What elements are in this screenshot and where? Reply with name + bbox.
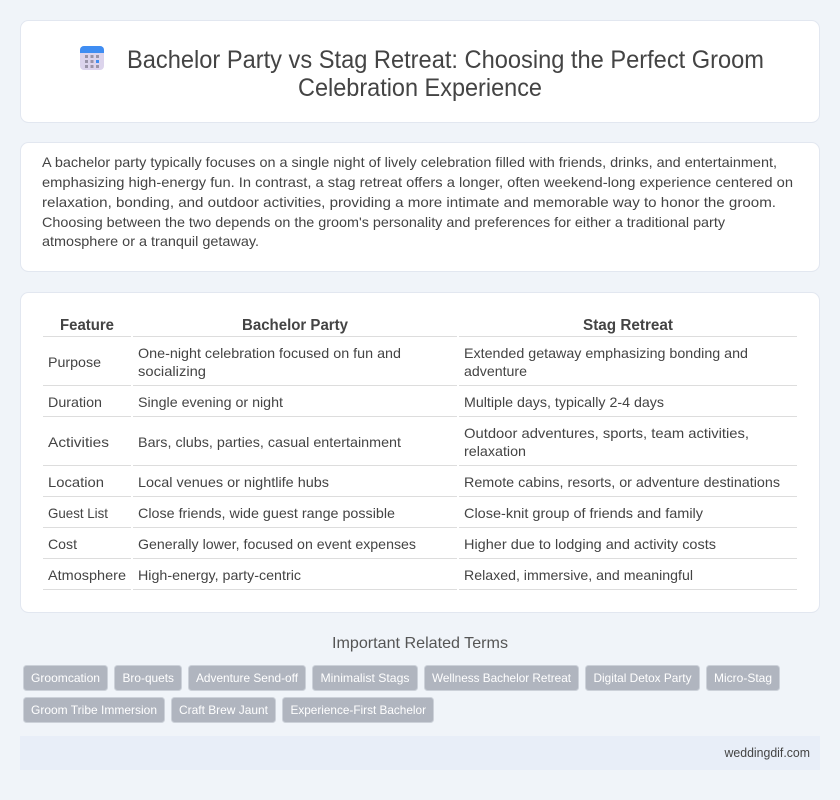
table header: Stag Retreat bbox=[583, 317, 673, 334]
row: purpose: One-night celebration focused on fun and bbox=[138, 345, 401, 361]
title: Bachelor Party vs Stag Retreat: Choosing the Perfect Groom bbox=[127, 46, 764, 74]
row: purpose: socializing bbox=[138, 363, 206, 379]
panel: intro text: emphasizing high-energy fun. In contrast, a stag retreat offers a longer, often weekend-long experience centered on bbox=[42, 174, 793, 190]
row: location: Remote cabins, resorts, or adventure destinations bbox=[464, 474, 780, 490]
row: activities: Activities bbox=[48, 434, 109, 450]
panel: related term tags: Adventure Send-off bbox=[196, 671, 299, 685]
row: atmosphere: Atmosphere bbox=[48, 567, 126, 583]
row: activities: relaxation bbox=[464, 443, 526, 459]
row: cost bbox=[43, 536, 797, 559]
icon: calendar bbox=[80, 46, 104, 70]
panel: related term tags: Craft Brew Jaunt bbox=[179, 703, 269, 717]
row: cost: Cost bbox=[48, 536, 77, 552]
panel: comparison table bbox=[20, 292, 820, 612]
row: purpose: adventure bbox=[464, 363, 527, 379]
row: guest list bbox=[43, 505, 797, 528]
table header bbox=[43, 317, 797, 337]
row: guest list: Guest List bbox=[48, 505, 108, 521]
panel: header bbox=[20, 20, 820, 122]
row: location: Local venues or nightlife hubs bbox=[138, 474, 329, 490]
row: purpose: Purpose bbox=[48, 354, 101, 370]
panel: intro text: A bachelor party typically focuses on a single night of lively celebration filled with friends, drinks, and entertainment, bbox=[42, 154, 777, 170]
row: atmosphere: Relaxed, immersive, and meaningful bbox=[464, 567, 693, 583]
panel: intro text bbox=[20, 142, 820, 272]
row: cost: Generally lower, focused on event expenses bbox=[138, 536, 416, 552]
row: atmosphere: High-energy, party-centric bbox=[138, 567, 301, 583]
panel: related term tags: Groom Tribe Immersion bbox=[31, 703, 157, 717]
row: cost: Higher due to lodging and activity costs bbox=[464, 536, 716, 552]
row: guest list: Close-knit group of friends and family bbox=[464, 505, 703, 521]
title bbox=[127, 46, 764, 102]
title: Celebration Experience bbox=[298, 74, 542, 102]
row: duration bbox=[43, 394, 797, 417]
panel: related term tags: Experience-First Bachelor bbox=[290, 703, 426, 717]
footer: weddingdif.com bbox=[724, 746, 810, 760]
row: duration: Single evening or night bbox=[138, 394, 283, 410]
row: duration: Duration bbox=[48, 394, 102, 410]
row: purpose bbox=[43, 345, 797, 386]
panel: related term tags: Groomcation bbox=[31, 671, 100, 685]
row: purpose: Extended getaway emphasizing bonding and bbox=[464, 345, 748, 361]
row: location bbox=[43, 474, 797, 497]
panel: intro text: relaxation, bonding, and outdoor activities, providing a more intimate and memorable way to honor the groom. bbox=[42, 194, 776, 210]
heading: important related terms: Important Related Terms bbox=[332, 635, 508, 652]
row: guest list: Close friends, wide guest range possible bbox=[138, 505, 395, 521]
row: activities bbox=[43, 425, 797, 466]
panel: related term tags bbox=[24, 666, 780, 722]
panel: related term tags: Wellness Bachelor Retreat bbox=[432, 671, 572, 685]
row: atmosphere bbox=[43, 567, 797, 590]
footer bbox=[20, 736, 820, 770]
row: location: Location bbox=[48, 474, 104, 490]
panel: intro text: atmosphere or a tranquil getaway. bbox=[42, 233, 259, 249]
panel: related term tags: Bro-quets bbox=[122, 671, 174, 685]
table header: Feature bbox=[60, 317, 114, 334]
panel: related term tags: Digital Detox Party bbox=[594, 671, 692, 685]
row: duration: Multiple days, typically 2-4 days bbox=[464, 394, 664, 410]
row: activities: Outdoor adventures, sports, team activities, bbox=[464, 425, 749, 441]
panel: related term tags: Micro-Stag bbox=[714, 671, 772, 685]
row: activities: Bars, clubs, parties, casual entertainment bbox=[138, 434, 401, 450]
panel: intro text: Choosing between the two depends on the groom's personality and preferences for either a traditional party bbox=[42, 214, 725, 230]
panel: related term tags: Minimalist Stags bbox=[320, 671, 410, 685]
table header: Bachelor Party bbox=[242, 317, 348, 334]
